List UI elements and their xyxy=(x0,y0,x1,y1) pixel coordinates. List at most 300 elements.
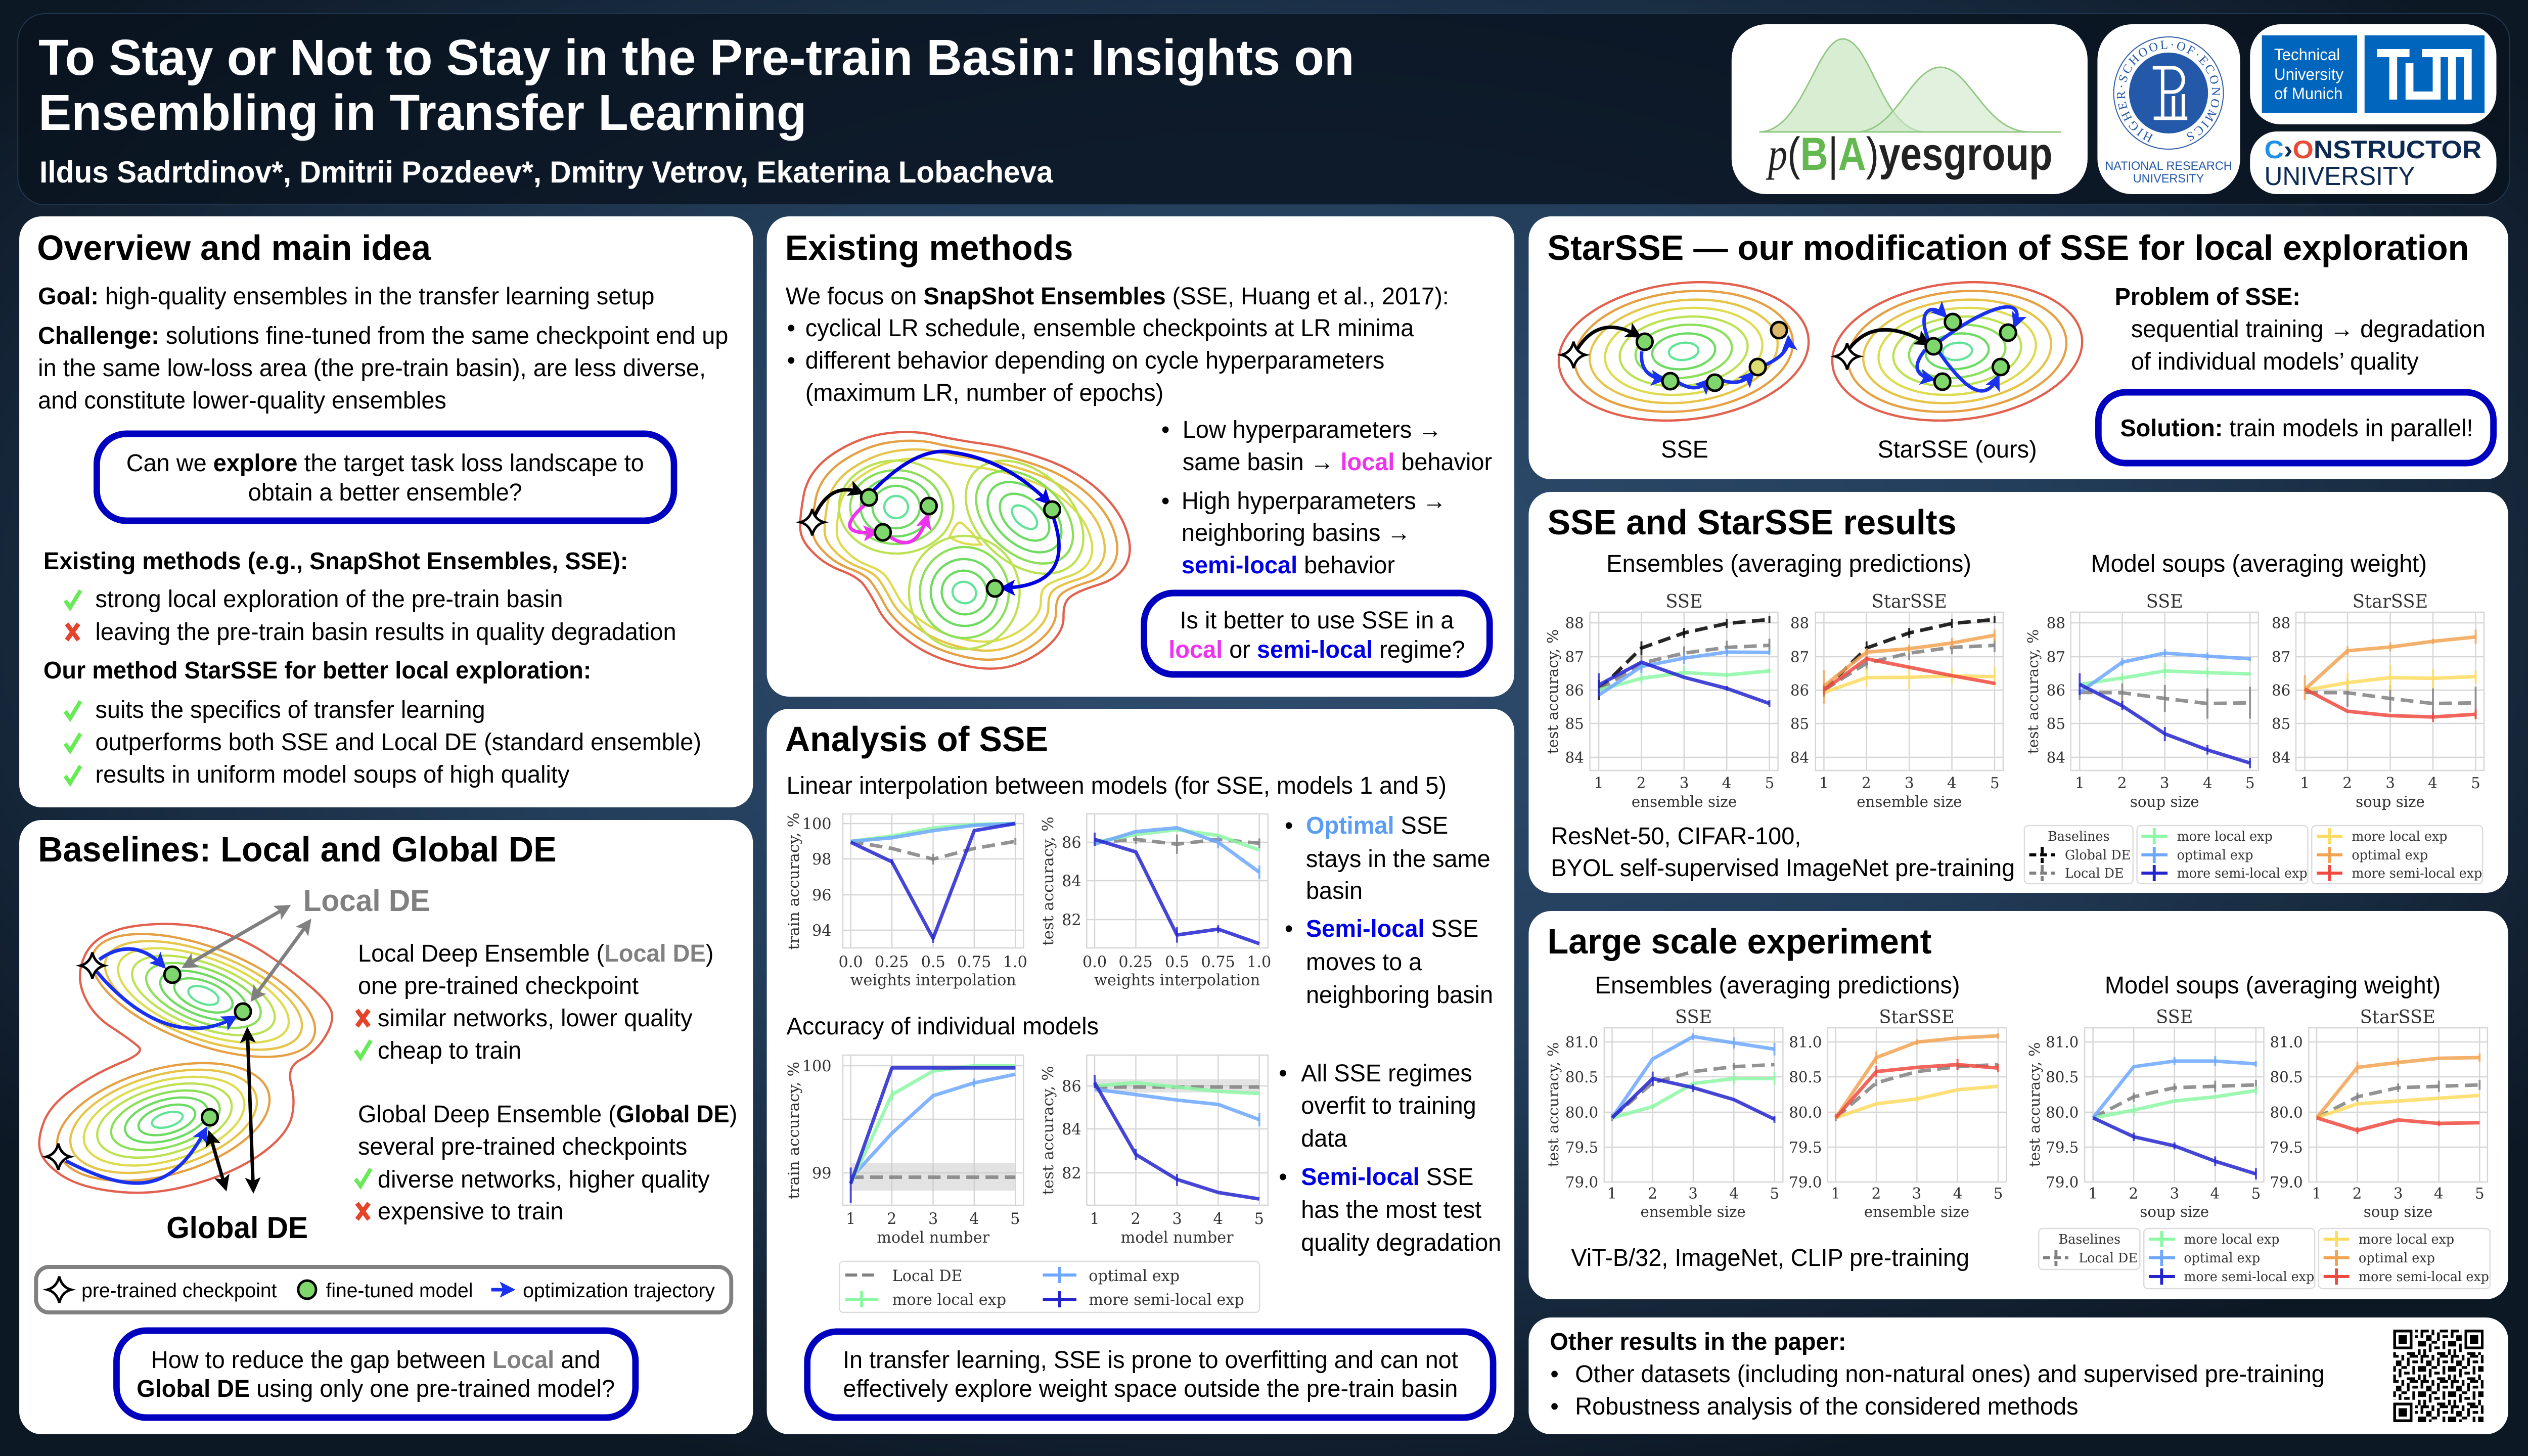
chart: SSE ensembles: 86 xyxy=(1565,681,1584,699)
chart: SSE ensembles large scale: 2 xyxy=(1648,1185,1657,1202)
chart: train accuracy per model: 4 xyxy=(969,1210,979,1228)
chart: StarSSE model soups: 3 xyxy=(2385,774,2395,792)
chart: StarSSE ensembles large scale: 4 xyxy=(1953,1185,1962,1202)
intro text and bullets: cyclical LR schedule, ensemble checkpoints at LR minima xyxy=(805,315,1414,342)
title line 2: Ensembling in Transfer Learning xyxy=(38,84,806,141)
legend: StarSSE series: more semi-local exp xyxy=(2359,1269,2489,1285)
chart: test accuracy interpolation xyxy=(1040,814,1271,989)
chart: StarSSE model soups large scale: 81.0 xyxy=(2270,1033,2303,1051)
chart: train accuracy per model: model number xyxy=(877,1229,990,1247)
hyperparameter bullets xyxy=(1161,417,1492,579)
heading: StarSSE — our modification of SSE for local exploration xyxy=(1548,228,2469,267)
panel: other results xyxy=(1528,1317,2508,1434)
chart: train accuracy interpolation xyxy=(785,812,1027,989)
legend: SSE series: more semi-local exp xyxy=(2184,1269,2314,1285)
chart: StarSSE model soups: 4 xyxy=(2428,774,2437,792)
chart: SSE model soups large scale: 80.5 xyxy=(2046,1068,2079,1086)
chart: SSE model soups: 84 xyxy=(2047,749,2065,766)
chart: test accuracy per model: 3 xyxy=(1172,1210,1182,1228)
logo: HSE xyxy=(2097,24,2240,194)
chart: SSE ensembles large scale: 80.0 xyxy=(1565,1104,1598,1121)
interpolation notes: Semi-local SSE xyxy=(1306,916,1478,942)
chart: SSE model soups large scale: 2 xyxy=(2129,1185,2138,1202)
chart: StarSSE model soups large scale: 1 xyxy=(2312,1185,2321,1202)
chart: SSE model soups: 2 xyxy=(2117,774,2127,792)
legend: analysis charts: optimal exp xyxy=(1089,1267,1180,1285)
legend: SSE series: more semi-local exp xyxy=(2177,866,2308,881)
logo: pBayes group xyxy=(1732,24,2088,194)
chart: SSE ensembles large scale: 5 xyxy=(1770,1185,1779,1202)
chart: SSE ensembles: 85 xyxy=(1565,715,1584,733)
our method list xyxy=(43,657,701,788)
chart: train accuracy interpolation: train accuracy, % xyxy=(785,812,803,950)
chart: StarSSE model soups: 5 xyxy=(2471,774,2480,792)
logo: Constructor University: C›ONSTRUCTOR xyxy=(2265,135,2481,164)
text: Global Deep Ensemble: several pre-trained checkpoints xyxy=(358,1133,687,1160)
chart: SSE model soups: 4 xyxy=(2203,774,2213,792)
chart: SSE ensembles large scale: ensemble size xyxy=(1640,1203,1746,1220)
chart: train accuracy per model: 99 xyxy=(812,1165,832,1182)
chart: StarSSE ensembles large scale: 3 xyxy=(1912,1185,1921,1202)
chart: test accuracy interpolation: 0.0 xyxy=(1082,953,1107,971)
text: other results list: Robustness analysis of the considered methods xyxy=(1575,1393,2079,1420)
callout: regime question: Is it better to use SSE in a xyxy=(1180,607,1454,634)
interpolation notes: • xyxy=(1285,812,1293,839)
panel: overview and main idea xyxy=(19,216,753,807)
chart: test accuracy per model: 86 xyxy=(1062,1078,1081,1096)
chart: SSE model soups: 88 xyxy=(2047,614,2065,632)
callout: solution: Solution: train models in parallel! xyxy=(2120,415,2473,442)
intro text and bullets: • xyxy=(787,315,795,342)
legend: baselines: Baselines xyxy=(2059,1232,2120,1247)
individual model notes: • xyxy=(1279,1164,1287,1191)
title: To Stay or Not to Stay in the Pre-train Basin: Insights on xyxy=(38,29,1355,85)
chart: train accuracy interpolation: 96 xyxy=(812,887,832,904)
legend: baselines: Local DE xyxy=(2065,866,2124,881)
legend: analysis charts: more local exp xyxy=(892,1291,1006,1309)
individual model notes: overfit to training xyxy=(1301,1093,1476,1119)
logo: HSE: HIGHER·SCHOOL·OF·ECONOMICS xyxy=(2117,40,2220,143)
chart: test accuracy interpolation: 1.0 xyxy=(1247,953,1271,971)
chart: train accuracy interpolation: 0.25 xyxy=(875,953,909,971)
chart: test accuracy per model: 84 xyxy=(1062,1121,1081,1139)
callout: explore question: obtain a better ensemble? xyxy=(248,479,522,506)
individual model notes xyxy=(1279,1060,1501,1256)
chart: StarSSE ensembles: 1 xyxy=(1819,774,1829,792)
interpolation notes: neighboring basin xyxy=(1306,982,1493,1009)
heading: SSE and StarSSE results xyxy=(1548,502,1957,542)
interpolation notes: stays in the same xyxy=(1306,846,1491,873)
legend: SSE series xyxy=(2137,826,2308,884)
chart: StarSSE ensembles large scale: 80.5 xyxy=(1789,1068,1822,1086)
chart: SSE model soups large scale xyxy=(2026,1007,2264,1220)
legend: figure symbols: optimization trajectory xyxy=(523,1280,715,1302)
chart: test accuracy interpolation: 84 xyxy=(1062,873,1081,890)
chart: train accuracy interpolation: 98 xyxy=(812,851,832,869)
logo: pBayes group: p(B|A)yesgroup xyxy=(1766,128,2053,180)
chart: test accuracy per model: model number xyxy=(1121,1229,1234,1247)
chart: StarSSE ensembles: 3 xyxy=(1905,774,1914,792)
problem text: sequential training → degradation xyxy=(2131,316,2486,343)
chart: SSE ensembles large scale: 4 xyxy=(1729,1185,1739,1202)
chart: StarSSE ensembles large scale: 80.0 xyxy=(1789,1104,1822,1121)
chart: SSE model soups large scale: 80.0 xyxy=(2046,1104,2079,1121)
problem text: Problem of SSE: xyxy=(2115,284,2300,310)
text: other results list: Other results in the paper: xyxy=(1550,1329,1846,1355)
goal text: Goal: high-quality ensembles in the transfer learning setup xyxy=(38,283,655,310)
chart: SSE ensembles: 5 xyxy=(1765,774,1774,792)
chart: test accuracy per model: 82 xyxy=(1062,1165,1081,1182)
chart: SSE ensembles large scale: 80.5 xyxy=(1565,1068,1598,1086)
logo: HSE: UNIVERSITY xyxy=(2133,172,2204,186)
chart: StarSSE model soups large scale: 5 xyxy=(2475,1185,2485,1202)
text: Local Deep Ensemble: Local Deep Ensemble (Local DE) xyxy=(358,940,713,967)
chart: test accuracy interpolation: 86 xyxy=(1062,834,1081,852)
chart: SSE model soups large scale: soup size xyxy=(2140,1203,2209,1220)
chart: SSE ensembles large scale: 1 xyxy=(1607,1185,1617,1202)
intro text and bullets: • xyxy=(787,347,795,374)
text: Global Deep Ensemble: diverse networks, higher quality xyxy=(378,1166,710,1193)
callout: solution xyxy=(2098,392,2494,463)
chart: SSE ensembles large scale: SSE xyxy=(1675,1007,1712,1028)
panel: SSE and StarSSE results xyxy=(1528,492,2508,893)
text: Local Deep Ensemble: similar networks, lower quality xyxy=(378,1005,693,1032)
chart: StarSSE model soups large scale: 80.0 xyxy=(2270,1104,2303,1121)
StarSSE landscape figure xyxy=(1826,270,2089,433)
intro text and bullets xyxy=(786,283,1449,406)
chart: train accuracy interpolation: weights interpolation xyxy=(850,972,1016,989)
chart: train accuracy interpolation: 0.0 xyxy=(839,953,863,971)
chart: test accuracy per model: 5 xyxy=(1254,1210,1264,1228)
legend: SSE series: optimal exp xyxy=(2177,848,2253,863)
icon: QR code xyxy=(2393,1330,2484,1422)
setup text xyxy=(1551,823,2015,882)
challenge text: and constitute lower-quality ensembles xyxy=(38,387,446,414)
individual model notes: • xyxy=(1279,1060,1287,1087)
chart: StarSSE ensembles: StarSSE xyxy=(1872,592,1947,612)
chart: StarSSE model soups xyxy=(2272,592,2484,810)
chart: StarSSE ensembles: 2 xyxy=(1862,774,1871,792)
callout: explore question xyxy=(97,434,674,521)
chart: test accuracy per model: 2 xyxy=(1131,1210,1141,1228)
legend: figure symbols: pre-trained checkpoint xyxy=(81,1280,277,1302)
heading: Baselines: Local and Global DE xyxy=(38,829,557,869)
panel: large scale experiment xyxy=(1528,911,2508,1299)
panel: analysis of SSE xyxy=(767,709,1514,1434)
chart: StarSSE ensembles: 87 xyxy=(1790,648,1809,666)
chart: train accuracy interpolation: 0.5 xyxy=(921,953,945,971)
chart: SSE ensembles: 4 xyxy=(1722,774,1731,792)
chart: SSE model soups large scale: 5 xyxy=(2251,1185,2261,1202)
legend: analysis charts: more semi-local exp xyxy=(1089,1291,1244,1309)
panel: StarSSE xyxy=(1528,216,2508,479)
chart: SSE model soups: soup size xyxy=(2130,793,2199,810)
chart: StarSSE ensembles: 86 xyxy=(1790,681,1809,699)
chart: SSE model soups: 3 xyxy=(2160,774,2170,792)
chart: StarSSE model soups large scale: 2 xyxy=(2353,1185,2362,1202)
text: Global Deep Ensemble xyxy=(355,1101,737,1225)
chart: StarSSE ensembles: 4 xyxy=(1947,774,1957,792)
loss landscape figure xyxy=(39,906,332,1202)
legend: figure symbols xyxy=(36,1267,731,1312)
individual model notes: data xyxy=(1301,1125,1347,1152)
logo: TUM: of Munich xyxy=(2274,84,2342,103)
text: other results list xyxy=(1550,1329,2325,1420)
chart: StarSSE model soups: 1 xyxy=(2300,774,2310,792)
legend: baselines xyxy=(2024,826,2133,884)
legend: StarSSE series: optimal exp xyxy=(2359,1251,2435,1266)
individual model notes: All SSE regimes xyxy=(1301,1060,1472,1087)
authors: Ildus Sadrtdinov*, Dmitrii Pozdeev*, Dmitry Vetrov, Ekaterina Lobacheva xyxy=(39,155,1054,189)
logo: TUM: University xyxy=(2274,65,2343,83)
callout: conclusion: effectively explore weight space outside the pre-train basin xyxy=(843,1376,1458,1402)
heading: Overview and main idea xyxy=(37,228,431,267)
chart: SSE model soups: 1 xyxy=(2075,774,2085,792)
chart: SSE model soups large scale: SSE xyxy=(2156,1007,2193,1028)
text: Global Deep Ensemble: expensive to train xyxy=(378,1198,563,1225)
text: other results list: • xyxy=(1550,1361,1559,1388)
chart: StarSSE model soups large scale: 3 xyxy=(2394,1185,2403,1202)
chart: SSE model soups large scale: 81.0 xyxy=(2046,1033,2079,1051)
interpolation notes: • xyxy=(1285,916,1293,942)
chart: SSE model soups: 87 xyxy=(2047,648,2065,666)
chart: train accuracy per model: 2 xyxy=(887,1210,896,1228)
chart: SSE model soups large scale: 1 xyxy=(2088,1185,2098,1202)
legend: baselines: Global DE xyxy=(2065,848,2131,863)
chart: SSE model soups large scale: 3 xyxy=(2170,1185,2179,1202)
challenge text xyxy=(38,323,728,414)
logo: TUM xyxy=(2250,24,2496,124)
chart: StarSSE ensembles large scale: 5 xyxy=(1994,1185,2003,1202)
chart: train accuracy interpolation: 94 xyxy=(812,922,832,940)
callout: conclusion xyxy=(807,1332,1493,1418)
text: Local Deep Ensemble: one pre-trained checkpoint xyxy=(358,973,639,999)
chart: StarSSE ensembles large scale: 81.0 xyxy=(1789,1033,1822,1051)
chart: StarSSE model soups: 87 xyxy=(2272,648,2290,666)
chart: train accuracy interpolation: 0.75 xyxy=(957,953,991,971)
label: Global DE: Global DE xyxy=(166,1210,308,1245)
individual model notes: has the most test xyxy=(1301,1197,1481,1223)
subheading: linear interpolation: Linear interpolation between models (for SSE, models 1 and 5) xyxy=(787,772,1447,799)
chart: StarSSE model soups: 88 xyxy=(2272,614,2290,632)
chart: StarSSE ensembles: 5 xyxy=(1990,774,2000,792)
logo: TUM: Technical xyxy=(2274,46,2340,64)
chart: StarSSE model soups large scale: soup size xyxy=(2364,1203,2433,1220)
callout: conclusion: In transfer learning, SSE is prone to overfitting and can not xyxy=(843,1347,1458,1374)
existing methods list xyxy=(43,548,676,646)
legend: StarSSE series xyxy=(2319,1228,2490,1289)
chart: SSE model soups large scale: 4 xyxy=(2210,1185,2220,1202)
interpolation notes: moves to a xyxy=(1306,949,1422,976)
chart: SSE ensembles: 2 xyxy=(1637,774,1646,792)
existing methods list: leaving the pre-train basin results in quality degradation xyxy=(95,619,676,646)
chart: StarSSE model soups: soup size xyxy=(2356,793,2425,810)
chart: test accuracy interpolation: test accuracy, % xyxy=(1040,816,1057,946)
chart: SSE ensembles xyxy=(1544,592,1778,810)
legend: baselines: Local DE xyxy=(2079,1251,2138,1266)
chart: StarSSE ensembles large scale: ensemble size xyxy=(1864,1203,1969,1220)
interpolation notes: Optimal SSE xyxy=(1306,812,1448,839)
chart: StarSSE ensembles large scale: 79.0 xyxy=(1789,1173,1822,1191)
chart: test accuracy interpolation: 82 xyxy=(1062,912,1081,929)
chart: SSE ensembles: SSE xyxy=(1665,592,1703,612)
chart: StarSSE ensembles large scale: 1 xyxy=(1831,1185,1840,1202)
chart: SSE ensembles: 1 xyxy=(1594,774,1603,792)
chart: test accuracy interpolation: 0.75 xyxy=(1201,953,1235,971)
chart: SSE ensembles: 84 xyxy=(1565,749,1584,766)
our method list: results in uniform model soups of high quality xyxy=(95,761,570,788)
label: Local DE: Local DE xyxy=(303,883,430,918)
chart: StarSSE ensembles: 88 xyxy=(1790,614,1809,632)
chart: train accuracy interpolation: 100 xyxy=(802,815,832,833)
callout: regime question: local or semi-local regime? xyxy=(1168,636,1465,663)
hyperparameter bullets: semi-local behavior xyxy=(1182,552,1395,579)
legend: StarSSE series: more local exp xyxy=(2352,829,2447,844)
subheading: model soups: Model soups (averaging weight) xyxy=(2091,551,2427,577)
chart: train accuracy per model: 5 xyxy=(1010,1210,1020,1228)
logo: Constructor University: UNIVERSITY xyxy=(2265,161,2415,191)
individual model notes: Semi-local SSE xyxy=(1301,1164,1474,1191)
chart: StarSSE ensembles large scale: StarSSE xyxy=(1879,1007,1955,1028)
chart: StarSSE model soups large scale: 79.5 xyxy=(2270,1139,2303,1156)
challenge text: Challenge: solutions fine-tuned from the same checkpoint end up xyxy=(38,323,728,349)
chart: SSE model soups large scale: 79.0 xyxy=(2046,1173,2079,1191)
chart: SSE model soups: 85 xyxy=(2047,715,2065,733)
chart: test accuracy per model: 4 xyxy=(1213,1210,1223,1228)
legend: SSE series: more local exp xyxy=(2177,829,2273,844)
interpolation notes xyxy=(1285,812,1493,1009)
chart: SSE model soups xyxy=(2024,592,2259,810)
chart: test accuracy per model xyxy=(1040,1055,1268,1247)
chart: StarSSE ensembles large scale: 79.5 xyxy=(1789,1139,1822,1156)
chart: StarSSE model soups large scale: 4 xyxy=(2434,1185,2444,1202)
chart: StarSSE ensembles large scale: 2 xyxy=(1872,1185,1881,1202)
legend: baselines: Baselines xyxy=(2048,829,2110,844)
hyperparameter bullets: Low hyperparameters → xyxy=(1183,417,1442,443)
chart: train accuracy per model: train accuracy, % xyxy=(785,1062,803,1199)
chart: train accuracy per model xyxy=(785,1055,1023,1247)
chart: test accuracy interpolation: 0.5 xyxy=(1165,953,1189,971)
legend: SSE series: more local exp xyxy=(2184,1232,2279,1247)
chart: SSE model soups: 5 xyxy=(2245,774,2255,792)
chart: SSE ensembles large scale xyxy=(1544,1007,1783,1220)
figure caption: StarSSE: StarSSE (ours) xyxy=(1877,436,2037,463)
chart: train accuracy per model: 100 xyxy=(802,1058,832,1075)
legend: SSE series: optimal exp xyxy=(2184,1251,2260,1266)
challenge text: in the same low-loss area (the pre-train basin), are less diverse, xyxy=(38,355,706,382)
chart: train accuracy per model: 3 xyxy=(928,1210,938,1228)
text: other results list: • xyxy=(1550,1393,1559,1420)
chart: SSE model soups: 86 xyxy=(2047,681,2065,699)
existing methods list: strong local exploration of the pre-train basin xyxy=(95,586,563,613)
callout: reduce the gap: Global DE using only one pre-trained model? xyxy=(137,1376,615,1402)
heading: Existing methods xyxy=(785,228,1073,267)
chart: StarSSE model soups large scale: StarSSE xyxy=(2360,1007,2435,1028)
panel: baselines xyxy=(19,820,753,1434)
heading: Analysis of SSE xyxy=(785,719,1048,759)
panel: existing methods xyxy=(767,216,1514,697)
problem text: of individual models’ quality xyxy=(2131,348,2419,375)
setup text: ResNet-50, CIFAR-100, xyxy=(1551,823,1801,850)
legend: StarSSE series: optimal exp xyxy=(2352,848,2428,863)
chart: StarSSE ensembles: ensemble size xyxy=(1857,793,1962,810)
chart: StarSSE model soups: 2 xyxy=(2342,774,2352,792)
chart: test accuracy per model: 1 xyxy=(1090,1210,1100,1228)
chart: SSE model soups: test accuracy, % xyxy=(2024,629,2042,754)
callout: explore question: Can we explore the target task loss landscape to xyxy=(126,450,644,477)
legend: figure symbols: fine-tuned model xyxy=(326,1280,473,1302)
hyperparameter bullets: same basin → local behavior xyxy=(1183,449,1492,476)
intro text and bullets: different behavior depending on cycle hyperparameters xyxy=(805,347,1384,374)
chart: SSE ensembles large scale: 79.0 xyxy=(1565,1173,1598,1191)
subheading: ensembles: Ensembles (averaging predictions) xyxy=(1606,551,1971,577)
hyperparameter bullets: High hyperparameters → xyxy=(1182,488,1447,515)
chart: StarSSE ensembles xyxy=(1790,592,2003,810)
chart: StarSSE model soups large scale xyxy=(2270,1007,2488,1220)
hyperparameter bullets: • xyxy=(1161,488,1169,515)
legend: analysis charts xyxy=(839,1261,1259,1312)
callout: reduce the gap xyxy=(116,1331,636,1418)
chart: test accuracy per model: test accuracy, % xyxy=(1040,1066,1057,1195)
setup text: ViT-B/32, ImageNet, CLIP pre-training xyxy=(1571,1245,1969,1271)
chart: SSE model soups large scale: test accuracy, % xyxy=(2026,1042,2043,1167)
our method list: Our method StarSSE for better local exploration: xyxy=(43,657,591,684)
chart: SSE ensembles: 3 xyxy=(1680,774,1689,792)
chart: StarSSE ensembles large scale xyxy=(1789,1007,2007,1220)
chart: SSE model soups: SSE xyxy=(2146,592,2183,612)
subheading: individual models: Accuracy of individual models xyxy=(787,1013,1099,1040)
SSE landscape figure xyxy=(1552,270,1816,433)
logo: Constructor University xyxy=(2250,131,2496,194)
chart: test accuracy interpolation: weights interpolation xyxy=(1094,972,1260,989)
header bar xyxy=(17,13,2510,205)
problem text xyxy=(2115,284,2486,375)
existing methods list: Existing methods (e.g., SnapShot Ensembles, SSE): xyxy=(43,548,628,575)
callout: regime question xyxy=(1144,593,1489,674)
intro text and bullets: (maximum LR, number of epochs) xyxy=(805,380,1163,406)
text: Global Deep Ensemble: Global Deep Ensemble (Global DE) xyxy=(358,1101,737,1128)
chart: SSE ensembles large scale: test accuracy, % xyxy=(1544,1042,1562,1167)
our method list: suits the specifics of transfer learning xyxy=(95,697,485,723)
chart: SSE model soups large scale: 79.5 xyxy=(2046,1139,2079,1156)
chart: SSE ensembles large scale: 79.5 xyxy=(1565,1139,1598,1156)
chart: StarSSE model soups: 86 xyxy=(2272,681,2290,699)
figure caption: SSE: SSE xyxy=(1661,436,1708,463)
logo: HSE: NATIONAL RESEARCH xyxy=(2105,160,2232,173)
chart: StarSSE model soups: 84 xyxy=(2272,749,2290,766)
hyperparameter bullets: • xyxy=(1161,417,1169,443)
chart: StarSSE model soups large scale: 80.5 xyxy=(2270,1068,2303,1086)
chart: test accuracy interpolation: 0.25 xyxy=(1118,953,1153,971)
legend: StarSSE series: more semi-local exp xyxy=(2352,866,2482,881)
heading: Large scale experiment xyxy=(1548,921,1931,961)
hyperparameter bullets: neighboring basins → xyxy=(1182,520,1411,547)
text: other results list: Other datasets (including non-natural ones) and supervised pre-training xyxy=(1575,1361,2325,1388)
chart: SSE ensembles large scale: 3 xyxy=(1688,1185,1698,1202)
chart: SSE ensembles: 88 xyxy=(1565,614,1584,632)
subheading: model soups: Model soups (averaging weight) xyxy=(2105,972,2441,999)
chart: SSE ensembles large scale: 81.0 xyxy=(1565,1033,1598,1051)
legend: StarSSE series xyxy=(2312,826,2482,884)
legend: analysis charts: Local DE xyxy=(892,1267,963,1285)
text: Local Deep Ensemble: cheap to train xyxy=(378,1037,521,1064)
text: Local Deep Ensemble xyxy=(355,940,713,1064)
chart: SSE ensembles: test accuracy, % xyxy=(1544,629,1561,754)
chart: SSE ensembles: ensemble size xyxy=(1632,793,1737,810)
interpolation notes: basin xyxy=(1306,878,1363,904)
legend: baselines xyxy=(2039,1228,2140,1269)
our method list: outperforms both SSE and Local DE (standard ensemble) xyxy=(95,729,701,756)
